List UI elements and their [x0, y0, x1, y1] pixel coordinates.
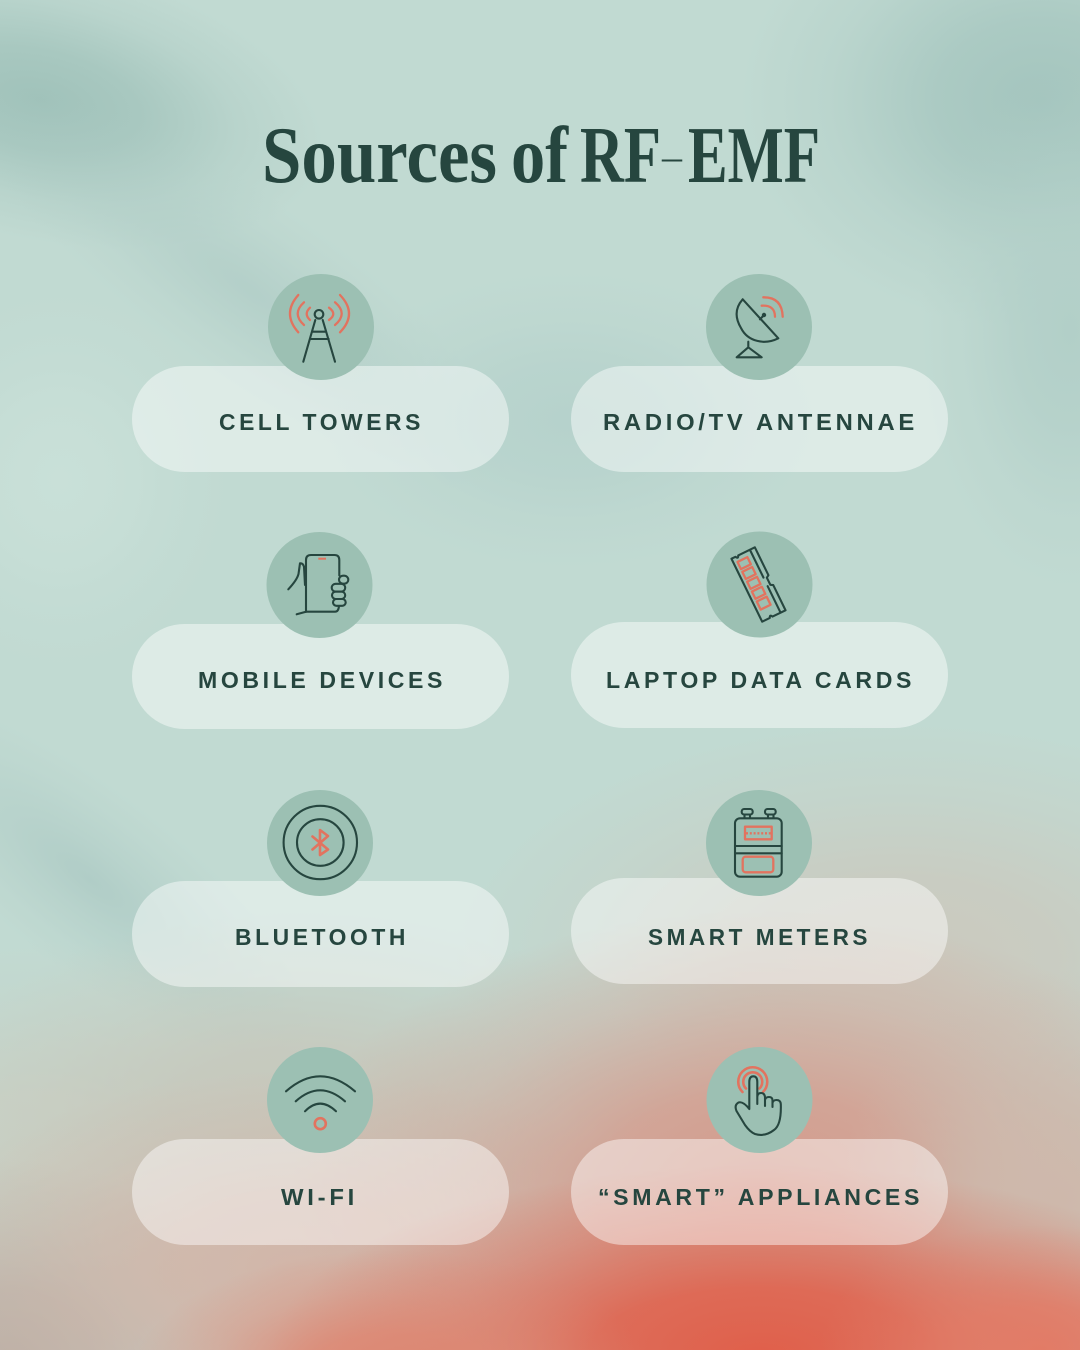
icon: cell tower: [290, 295, 349, 362]
panel: smart meters: [571, 790, 948, 984]
icon: satellite dish: [737, 297, 783, 357]
label: mobile devices: MOBILE DEVICES: [198, 667, 446, 693]
panel: laptop data cards: [571, 532, 948, 728]
panel: smart appliances: [571, 1047, 948, 1245]
title: –: [661, 134, 683, 179]
icon: wi-fi: [286, 1076, 355, 1129]
icon: bluetooth: [284, 806, 357, 879]
icon: smart meter: [735, 809, 782, 877]
label: laptop data cards: LAPTOP DATA CARDS: [606, 667, 915, 693]
panel: mobile devices: [132, 532, 509, 729]
label: smart meters: SMART METERS: [648, 924, 871, 950]
icon: memory card: [731, 547, 786, 622]
title: of: [511, 110, 569, 200]
icon: hand holding phone: [288, 555, 348, 614]
title: Sources: [262, 110, 497, 200]
icon: touch hand: [736, 1067, 781, 1135]
panel: bluetooth: [132, 790, 509, 987]
title: RF: [580, 110, 661, 200]
panel: cell towers: [132, 274, 509, 472]
label: bluetooth: BLUETOOTH: [235, 924, 409, 950]
label: cell towers: CELL TOWERS: [219, 409, 424, 435]
label: radio/tv antennae: RADIO/TV ANTENNAE: [603, 409, 918, 435]
title: EMF: [688, 110, 820, 200]
panel: radio/tv antennae: [571, 274, 948, 472]
title: [262, 110, 820, 200]
label: smart appliances: “SMART” APPLIANCES: [598, 1184, 923, 1210]
label: wi-fi: WI-FI: [281, 1184, 358, 1210]
panel: wi-fi: [132, 1047, 509, 1245]
